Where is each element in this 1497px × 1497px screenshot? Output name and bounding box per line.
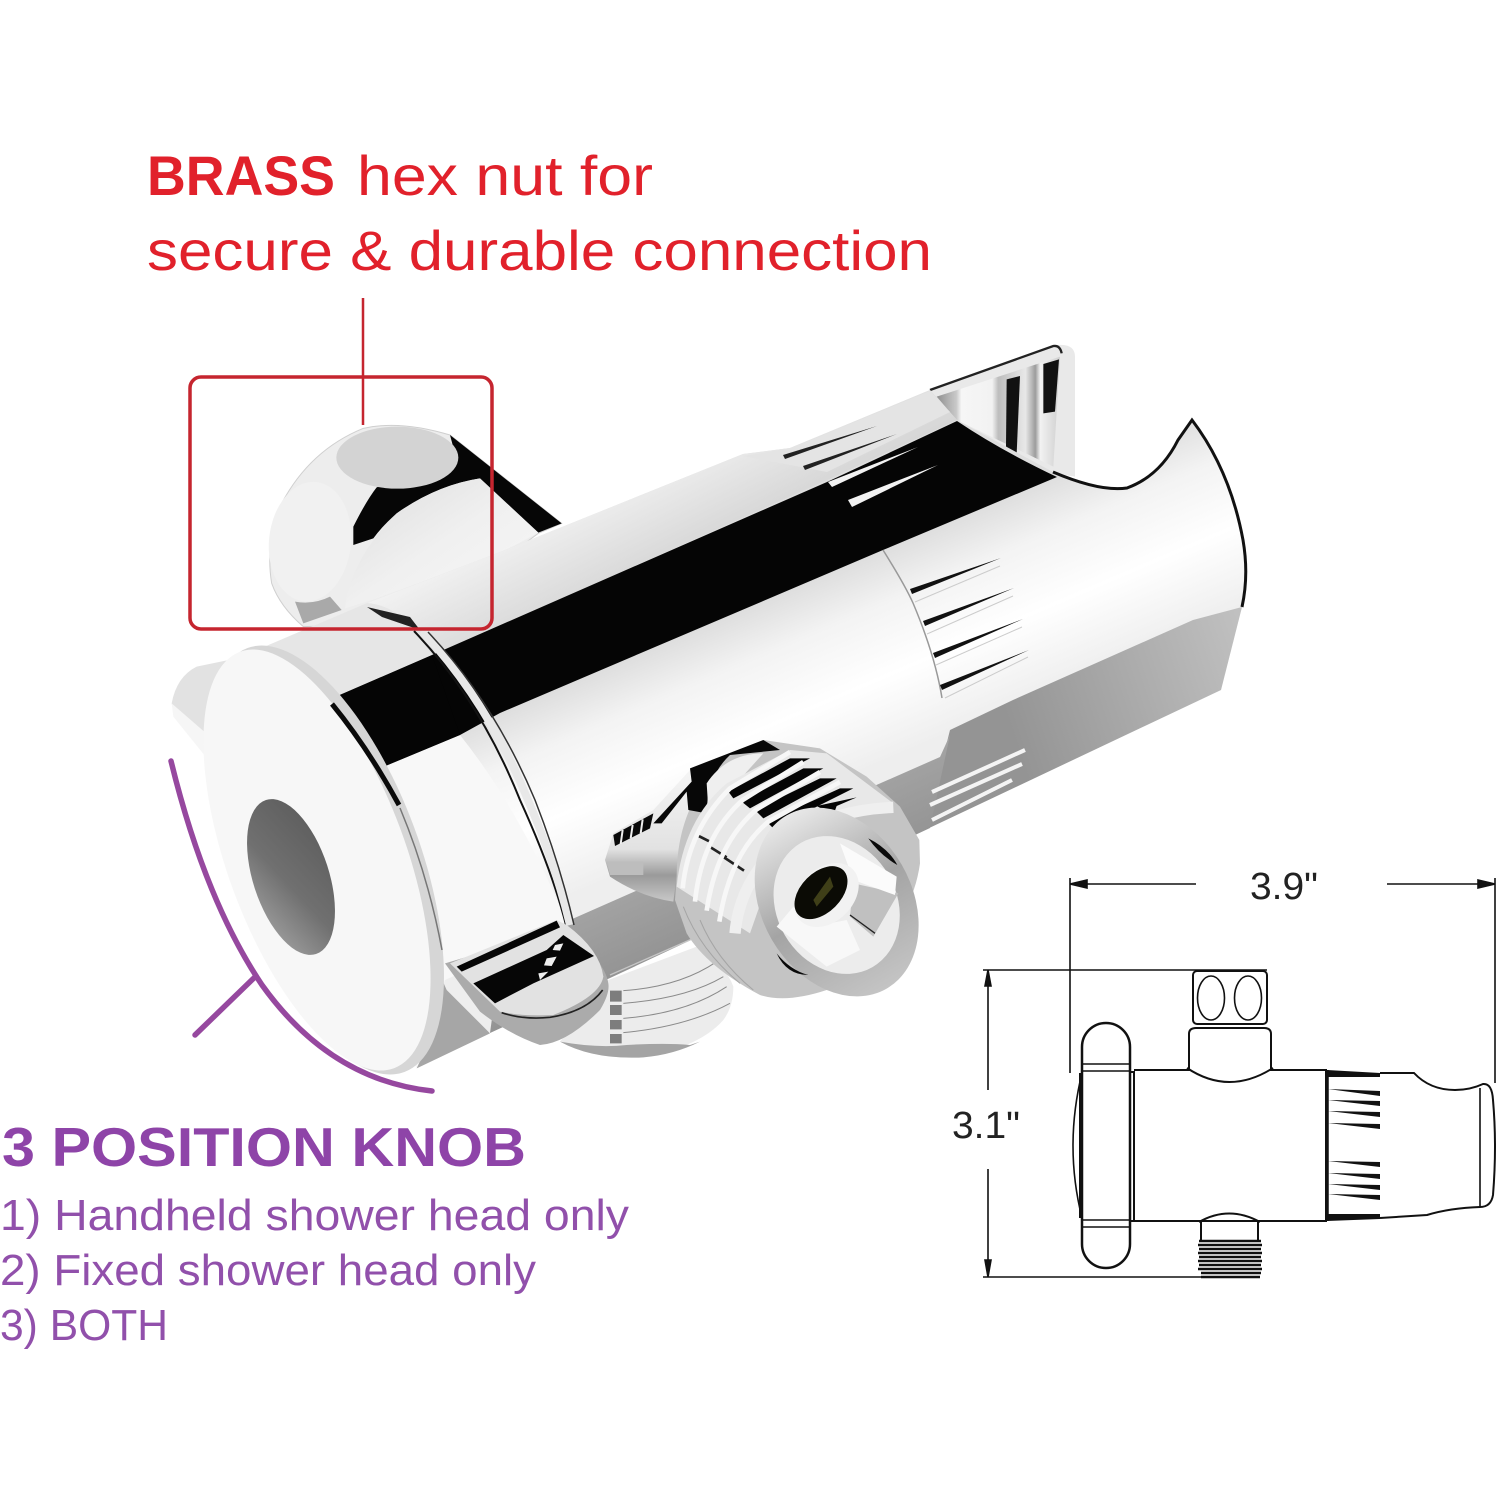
outlet thread lines [623, 962, 730, 1033]
knob rim light line [400, 808, 442, 950]
hook lip [445, 928, 609, 1045]
tick [803, 434, 897, 470]
thread short dark marks [697, 835, 770, 888]
knob centre hole [230, 788, 352, 966]
nut black reflection [353, 435, 562, 545]
nut right facet [345, 478, 538, 608]
outlet grey squares [610, 991, 622, 1043]
nut silhouette [270, 425, 562, 627]
inner grey wedge [850, 883, 898, 937]
barb grey band [607, 862, 643, 875]
tick [933, 619, 1023, 658]
inner lower wedge [777, 907, 860, 967]
rear holder clip [930, 345, 1075, 477]
tick [783, 426, 877, 459]
tick [930, 764, 1022, 805]
nut outline [1193, 971, 1267, 1024]
main body cylinder [257, 390, 1247, 1068]
black reflection band [335, 421, 1057, 767]
clip stripe black right [1043, 359, 1059, 413]
tick [828, 447, 918, 487]
purple arc [171, 761, 432, 1091]
knob heading: 3 POSITION KNOB [2, 1116, 526, 1178]
hex nut [263, 425, 562, 627]
width dimension text: 3.9" [1250, 866, 1318, 908]
thread black stripes [728, 758, 853, 828]
hook black stripe 2 [473, 935, 594, 1003]
knob face outer rim [159, 615, 493, 1105]
tick [848, 465, 938, 507]
lever upper surface [172, 659, 232, 743]
extension and dimension lines [983, 878, 1495, 1277]
outlet body [560, 947, 733, 1058]
arrowheads [985, 880, 1495, 1277]
heading line 1 remainder: hex nut for [357, 144, 653, 207]
grip rib wedges [1327, 1070, 1380, 1221]
clip top dark edge [930, 346, 1062, 390]
knob clip hook [445, 920, 609, 1045]
clip opening edge [1053, 420, 1246, 607]
knob face [157, 621, 477, 1099]
dimension drawing [952, 866, 1495, 1277]
outlet bore [784, 856, 858, 929]
holder end outline [1380, 1073, 1495, 1218]
knob rim dark arc [332, 704, 399, 805]
neck [1187, 1028, 1273, 1082]
tick [910, 558, 1001, 594]
grip ribs [1325, 1070, 1329, 1221]
callout arc: knob [171, 761, 432, 1091]
callout box: hex nut [190, 298, 492, 629]
nut facet left [1198, 976, 1224, 1020]
nut bottom shade [295, 597, 342, 623]
red frame [190, 377, 492, 629]
knob face [1073, 1073, 1082, 1218]
option 3: 3) BOTH [0, 1301, 168, 1350]
knob lever outline [1082, 1023, 1130, 1268]
outlet top line [610, 938, 693, 975]
text block: 3 position knob [0, 1116, 629, 1350]
inner black arcs [777, 838, 897, 975]
barb [605, 770, 710, 902]
grey under cap [417, 960, 490, 1068]
barb black teeth [613, 813, 653, 846]
thread crest area [677, 750, 893, 933]
top and bottom ribs [1327, 1070, 1380, 1221]
holder end inner line [1479, 1088, 1481, 1207]
bore surround [782, 850, 871, 940]
tick [932, 750, 1025, 792]
grip ticks lower [930, 750, 1025, 820]
heading line 1: BRASS [147, 144, 335, 207]
connector line [362, 298, 364, 425]
bore olive glint [813, 877, 833, 907]
knob face thick edge [1079, 1073, 1083, 1218]
hook dark edge [502, 990, 603, 1018]
neck black reflection [653, 740, 780, 823]
option 1: 1) Handheld shower head only [0, 1191, 629, 1240]
front thread band [735, 807, 893, 933]
thread small black notch [817, 797, 857, 815]
heading: brass hex nut [147, 144, 932, 282]
chrome ring highlight [422, 631, 570, 925]
nut top facet [336, 427, 458, 489]
inner white wedge [840, 843, 897, 895]
under-cap shade [417, 960, 490, 1068]
light section above band [743, 391, 950, 472]
lower grey shadow band [490, 735, 950, 1033]
tick [940, 650, 1029, 690]
knob lever bands [1083, 1064, 1129, 1227]
knob lever behind cap [172, 659, 232, 760]
grip ticks middle [910, 558, 1029, 698]
clip inner chrome [937, 357, 1060, 467]
side fitting [605, 740, 952, 1026]
chrome ring outer edge [428, 632, 574, 925]
nut left facet [263, 478, 357, 606]
thread body silhouette [675, 740, 920, 998]
nut facet right [1234, 976, 1262, 1020]
heading line 2: secure & durable connection [147, 219, 932, 282]
lower threaded outlet [560, 938, 733, 1058]
upper tick wedges [1328, 1089, 1380, 1200]
barb teeth cuts [621, 819, 643, 844]
product photo: chrome diverter [157, 345, 1247, 1105]
inner dark line [850, 915, 875, 933]
hook upper plate [450, 920, 603, 1015]
neck light dome [707, 753, 763, 810]
ring teeth [367, 607, 420, 630]
bottom threads [1198, 1241, 1262, 1277]
upper body surface [350, 390, 957, 700]
thread white crests [683, 752, 840, 922]
height dimension text: 3.1" [952, 1105, 1020, 1147]
chrome ring [414, 631, 566, 925]
hook highlight slots [538, 943, 563, 980]
tick shadows [915, 566, 1028, 698]
tick [923, 588, 1014, 626]
tick [932, 780, 1012, 820]
lower grey shadow right [925, 607, 1242, 830]
lower ring lines [683, 907, 753, 990]
knob cap side [257, 603, 568, 1068]
main body [1130, 1070, 1326, 1221]
hook black stripe 1 [457, 921, 560, 972]
purple leader [195, 976, 256, 1035]
section boundary [883, 550, 942, 698]
lever lower edge [172, 703, 210, 760]
nut end ring [722, 778, 952, 1026]
nut end inner [749, 813, 924, 997]
grip ticks upper [783, 426, 938, 507]
cap top shade [257, 603, 432, 697]
black band on cap [335, 655, 460, 767]
bottom fitting [1199, 1214, 1260, 1240]
clip stripe black [1006, 376, 1020, 453]
outlet base band [560, 1042, 700, 1058]
clip outer plate [930, 345, 1075, 477]
option 2: 2) Fixed shower head only [0, 1246, 536, 1295]
